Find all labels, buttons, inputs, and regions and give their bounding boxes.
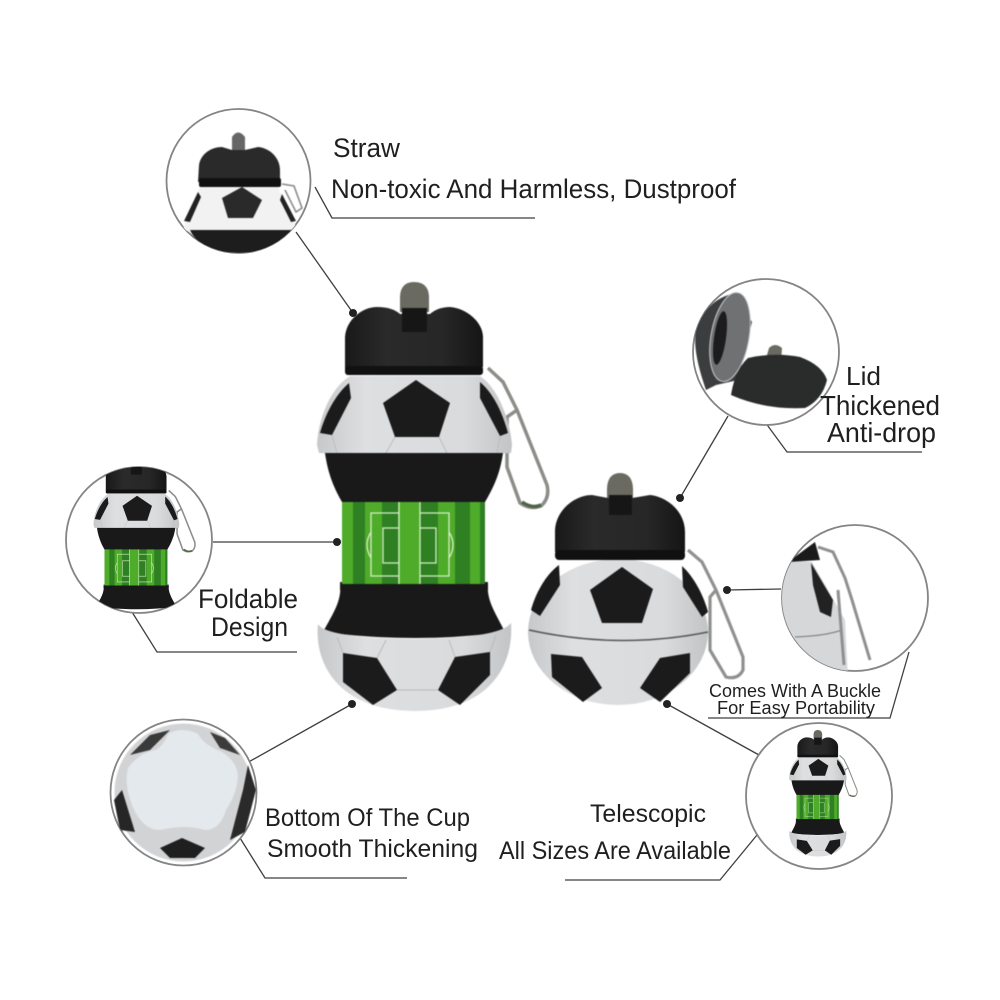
circle: buckle detail xyxy=(781,525,928,680)
label: lid: Anti-drop xyxy=(827,417,936,448)
circle: bottom of the cup detail xyxy=(110,720,256,866)
label: straw xyxy=(331,133,736,204)
tall football bottle xyxy=(317,282,548,711)
label: foldable design: Foldable xyxy=(198,584,298,614)
label: bottom of the cup: Smooth Thickening xyxy=(267,835,478,863)
circle: foldable detail xyxy=(66,453,212,613)
label: buckle xyxy=(709,681,881,718)
label: foldable design: Design xyxy=(211,612,288,642)
label: telescopic xyxy=(499,800,731,865)
label: buckle: Comes With A Buckle xyxy=(709,681,881,701)
label: foldable design xyxy=(198,584,298,642)
label: bottom of the cup: Bottom Of The Cup xyxy=(265,804,470,832)
circle: telescopic detail xyxy=(746,723,892,869)
label: lid xyxy=(820,361,940,448)
label: lid: Thickened xyxy=(820,390,940,421)
label: straw: Straw xyxy=(333,133,400,163)
label: lid: Lid xyxy=(846,361,881,391)
connector lines and callout underlines xyxy=(132,187,922,880)
circle: lid detail xyxy=(693,279,839,425)
circle: straw detail xyxy=(166,109,310,253)
label: buckle: For Easy Portability xyxy=(717,698,875,718)
label: telescopic: Telescopic xyxy=(590,800,706,828)
collapsed football bottle xyxy=(528,473,743,705)
label: telescopic: All Sizes Are Available xyxy=(499,837,731,865)
label: straw: Non-toxic And Harmless, Dustproof xyxy=(331,174,736,204)
label: bottom of the cup xyxy=(265,804,478,863)
dot markers xyxy=(333,309,731,708)
